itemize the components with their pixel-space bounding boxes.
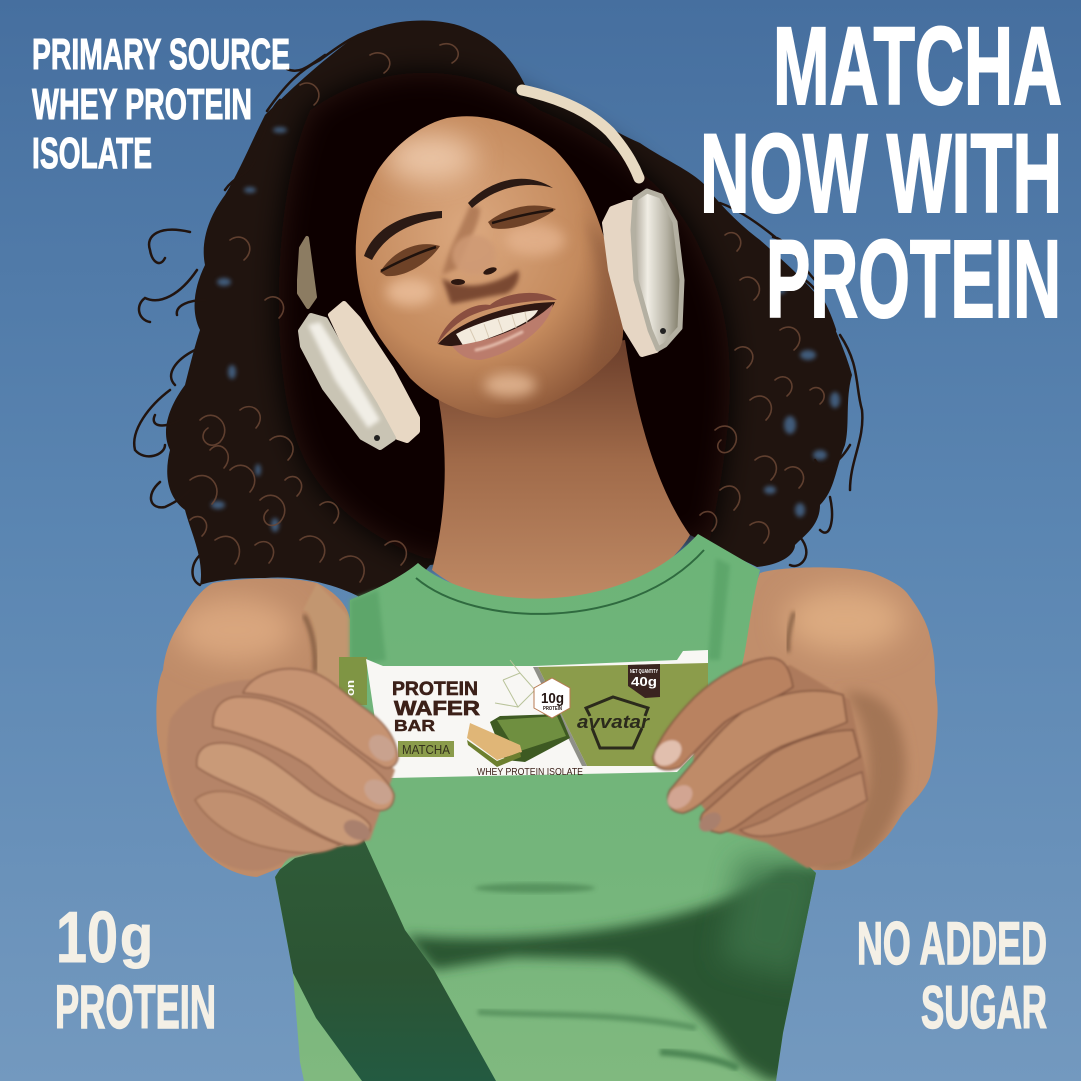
nose bridge shadow (442, 205, 480, 275)
forehead highlight (384, 134, 476, 182)
avvatar logo (577, 697, 650, 748)
product name line 2: WAFER (394, 698, 481, 720)
protein wafer bar packaging (339, 650, 708, 778)
thumb (653, 658, 793, 770)
callout: 10g protein: 10 (56, 898, 118, 978)
middle finger (668, 691, 847, 813)
neck and chest (432, 340, 690, 608)
nails (364, 730, 400, 766)
left metal cup (301, 316, 393, 447)
avvatar logo: avvatar (577, 712, 650, 732)
strap seams (350, 558, 730, 668)
right side shading (587, 226, 623, 344)
callout: 10g protein (55, 898, 216, 1041)
shoulder highlight (175, 598, 295, 662)
mouth (437, 293, 557, 360)
palm (690, 665, 870, 868)
callout: 10g protein: g (120, 904, 153, 969)
metal cup highlight (308, 322, 380, 428)
index finger (243, 669, 398, 768)
woman's curly hair (134, 21, 862, 601)
side shading (720, 860, 830, 980)
armpit crease (788, 612, 794, 652)
ring finger (197, 743, 370, 845)
net weight tag: NET QUANTITY (630, 669, 658, 675)
tab text: uo (345, 680, 357, 696)
left hand (167, 669, 400, 871)
palm (167, 680, 395, 871)
face (356, 116, 625, 418)
headphones (299, 90, 682, 447)
wafer illustration (467, 714, 570, 767)
protein hexagon badge: PROTEIN (543, 706, 562, 712)
ring finger (701, 730, 860, 833)
callout: no added sugar (857, 910, 1047, 1041)
net weight tag: 40g (631, 674, 657, 689)
right arm and shoulder (742, 567, 938, 870)
headband left (299, 238, 315, 307)
right hand (649, 658, 870, 868)
headline: matcha now with protein (700, 5, 1062, 341)
left arm and shoulder (156, 578, 350, 877)
lower creases (478, 1012, 696, 1028)
right ear cushion (605, 203, 656, 354)
shoulder highlight (785, 588, 905, 652)
network decoration (495, 660, 550, 715)
tooth gaps (470, 312, 527, 342)
inner arm (306, 586, 350, 686)
protein hexagon badge (534, 678, 570, 718)
callout: primary source whey protein isolate: WHEY PROTEIN (32, 80, 252, 129)
mouth interior (438, 302, 555, 346)
cheek highlights (386, 278, 434, 306)
end tab (339, 657, 367, 705)
headband right (522, 90, 639, 178)
pinky (195, 791, 340, 853)
callout: 10g protein: PROTEIN (55, 973, 216, 1041)
net weight tag (628, 664, 660, 698)
right eyebrow (468, 179, 553, 208)
teeth (456, 310, 538, 347)
product name line 3: BAR (394, 718, 436, 735)
under-bust shadow (405, 870, 830, 1081)
nails (649, 735, 687, 771)
nose tip (452, 235, 496, 275)
grey edge stripe (533, 667, 587, 766)
elbow shadow (807, 692, 906, 871)
right metal cup (633, 191, 682, 349)
upper crease (475, 883, 595, 893)
lip highlight (476, 332, 522, 350)
upper lip (437, 293, 557, 344)
diagonal arm shadow (270, 840, 496, 1081)
left ear cushion (331, 304, 417, 440)
left closed eye (380, 244, 440, 276)
olive panel (538, 663, 708, 766)
pinky (740, 772, 867, 836)
nostrils (451, 279, 465, 285)
right closed eye (488, 205, 556, 229)
green tank top (270, 534, 830, 1081)
product name: PROTEIN (392, 679, 478, 700)
middle finger (213, 697, 394, 810)
protein hexagon badge: 10g (541, 690, 564, 707)
callout: primary source whey protein isolate: ISOLATE (32, 129, 152, 178)
armpit crease (304, 615, 315, 672)
callout: primary source whey protein isolate (32, 30, 290, 178)
left eyebrow (364, 211, 442, 260)
under-nose shadow (442, 270, 519, 304)
collar trim (416, 550, 704, 614)
callout: primary source whey protein isolate: PRIMARY SOURCE (32, 30, 290, 79)
flavour tag: MATCHA (402, 742, 450, 757)
whey protein isolate strip text: WHEY PROTEIN ISOLATE (477, 767, 583, 778)
white wrapper (366, 650, 708, 778)
lower lip (452, 304, 553, 360)
